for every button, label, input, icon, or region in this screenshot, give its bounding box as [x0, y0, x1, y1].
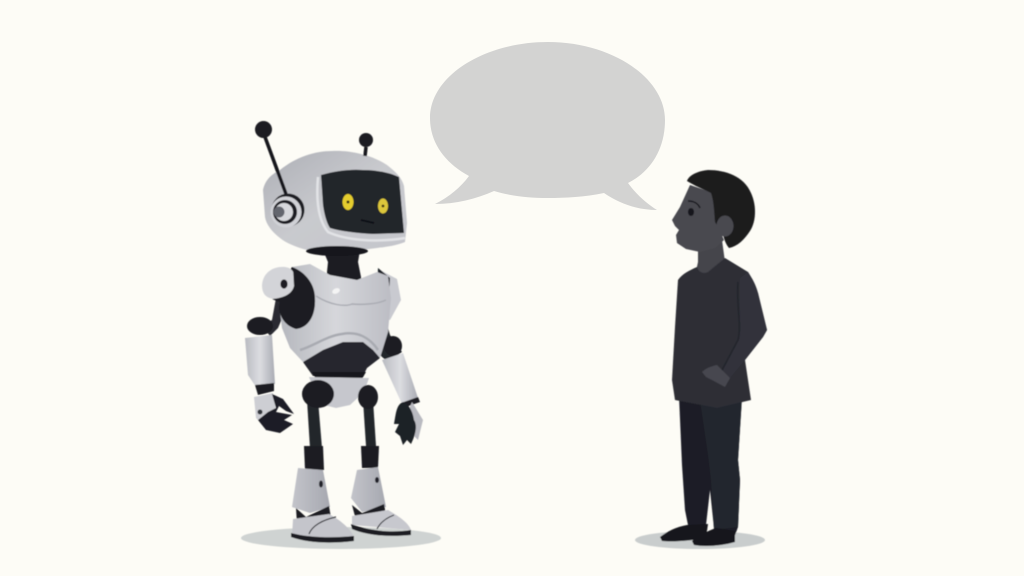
robot waist and neck — [303, 250, 380, 379]
person shoes — [660, 524, 735, 546]
robot eyes — [342, 194, 388, 214]
robot shoulder — [262, 267, 302, 303]
robot right arm — [374, 268, 423, 445]
robot — [241, 121, 441, 549]
speech bubble — [430, 42, 665, 210]
person hand — [702, 365, 730, 387]
robot mouth — [361, 220, 374, 223]
robot ground shadow — [241, 527, 441, 549]
person shirt — [672, 258, 767, 408]
robot pelvis — [302, 377, 378, 409]
person neck — [695, 240, 725, 276]
robot head — [263, 151, 407, 256]
person trousers — [679, 396, 742, 541]
robot ear — [270, 194, 304, 228]
robot screen — [321, 170, 404, 234]
person ear — [716, 216, 734, 236]
person ground shadow — [635, 531, 765, 549]
person — [635, 170, 767, 549]
robot left arm — [245, 298, 294, 433]
robot torso — [279, 264, 391, 362]
robot antennas — [255, 121, 373, 194]
robot boots — [291, 467, 411, 543]
robot legs — [304, 400, 379, 470]
person face — [672, 185, 724, 252]
person hair — [687, 170, 755, 248]
person eye and brow — [688, 201, 700, 216]
